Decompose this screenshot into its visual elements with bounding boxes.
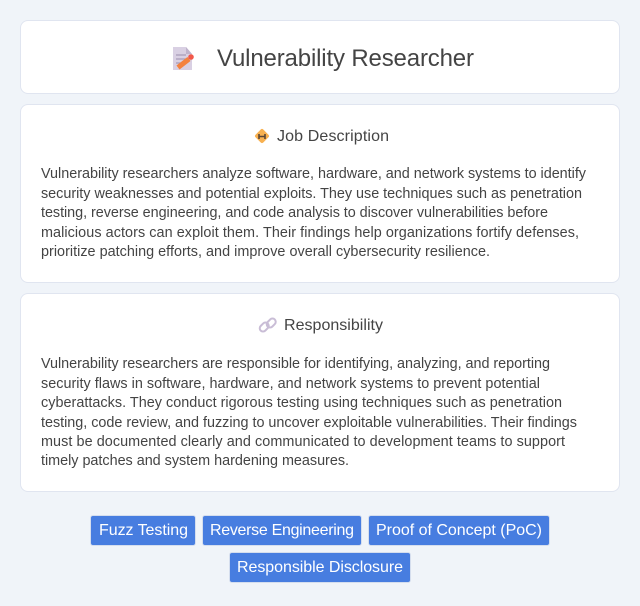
tag: responsible disclosure: Responsible Disclosure (237, 559, 403, 576)
text block: responsibility: testing, code review, and fuzzing to uncover exploitable vulnerabilities. Their findings (41, 415, 577, 431)
panel: responsibility (20, 294, 620, 492)
icon: orange diamond (254, 128, 270, 144)
text block: job description: prioritize patching efforts, and improve overall cybersecurity resilience. (41, 244, 490, 260)
text block: responsibility: timely patches and system hardening measures. (41, 453, 349, 469)
tag: reverse engineering: Reverse Engineering (210, 522, 354, 539)
text block: job description (41, 166, 587, 260)
text block: responsibility: must be documented clearly and communicated to development teams to support (41, 434, 565, 450)
tag: reverse engineering (202, 516, 362, 546)
text block: job description: Vulnerability researchers analyze software, hardware, and network systems to identify (41, 166, 587, 182)
text block: job description: security weaknesses and potential exploits. They use techniques such as penetration (41, 186, 582, 202)
tag: proof of concept (368, 516, 550, 546)
text block: responsibility: cyberattacks. They conduct rigorous testing using techniques such as penetration (41, 395, 562, 411)
text block: job description: testing, reverse engineering, and code analysis to discover vulnerabilities before (41, 205, 548, 221)
icon: chain link (258, 317, 277, 333)
icon: document with pencil (173, 47, 194, 70)
tag: fuzz testing (90, 516, 196, 546)
text block: job description: malicious actors can exploit them. Their findings help organizations fortify defenses, (41, 225, 579, 241)
text block: responsibility (41, 356, 577, 469)
panel: job description (20, 104, 620, 282)
tag: proof of concept: Proof of Concept (PoC) (376, 522, 542, 539)
text block: responsibility: security flaws in software, hardware, and network systems to prevent potential (41, 376, 540, 392)
panel: title card (20, 20, 620, 94)
heading: job description: Job Description (277, 128, 389, 145)
tag: fuzz testing: Fuzz Testing (99, 522, 188, 539)
text block: responsibility: Vulnerability researchers are responsible for identifying, analyzing, and reporting (41, 356, 550, 372)
tag: responsible disclosure (230, 552, 410, 582)
heading: responsibility: Responsibility (284, 317, 383, 334)
title: Vulnerability Researcher (217, 45, 474, 72)
